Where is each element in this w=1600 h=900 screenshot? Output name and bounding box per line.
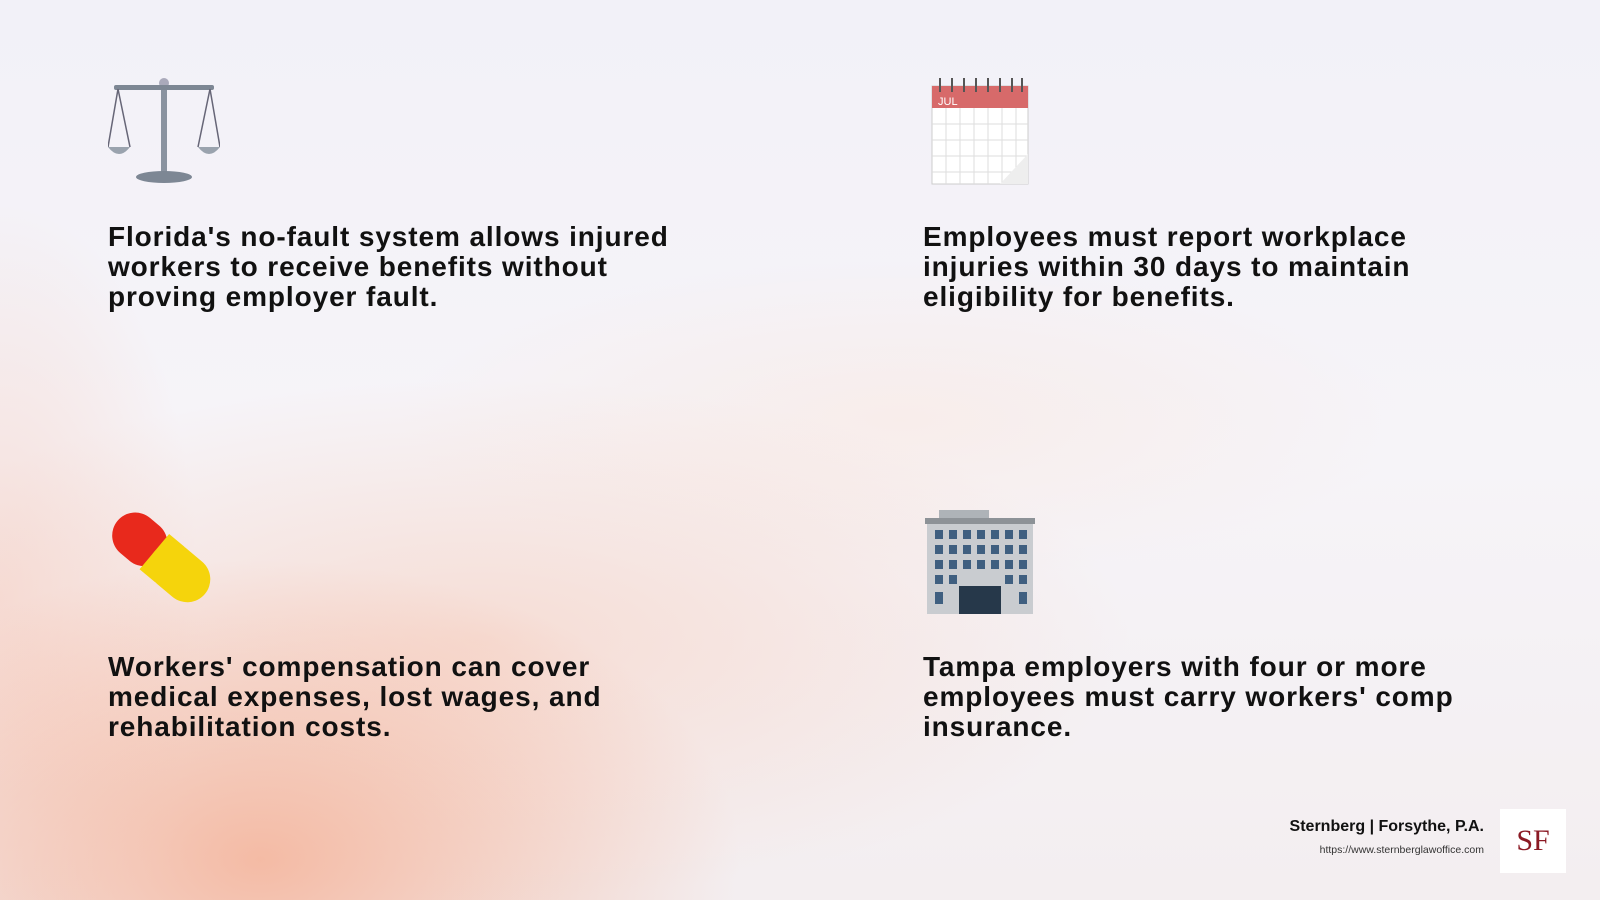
logo [1500, 809, 1566, 873]
footer: firm name and url: Sternberg | Forsythe, P.A. [1290, 818, 1484, 835]
icon: pill [112, 512, 210, 602]
icon: calendar [932, 78, 1028, 184]
text: employers: Tampa employers with four or more employees must carry workers' comp insurance. [923, 651, 1454, 742]
icon: scales [108, 78, 220, 183]
logo: SF [1516, 824, 1550, 857]
footer: firm name and url [1290, 818, 1484, 856]
text: 30 days: Employees must report workplace injuries within 30 days to maintain eligibility for benefits. [923, 221, 1410, 312]
text: coverage: Workers' compensation can cover medical expenses, lost wages, and rehabilitation costs. [108, 651, 601, 742]
footer: firm name and url: https://www.sternberglawoffice.com [1320, 844, 1484, 856]
text: no-fault: Florida's no-fault system allows injured workers to receive benefits without proving employer fault. [108, 221, 669, 312]
icon: calendar: JUL [938, 96, 958, 108]
icon: building [925, 510, 1035, 614]
